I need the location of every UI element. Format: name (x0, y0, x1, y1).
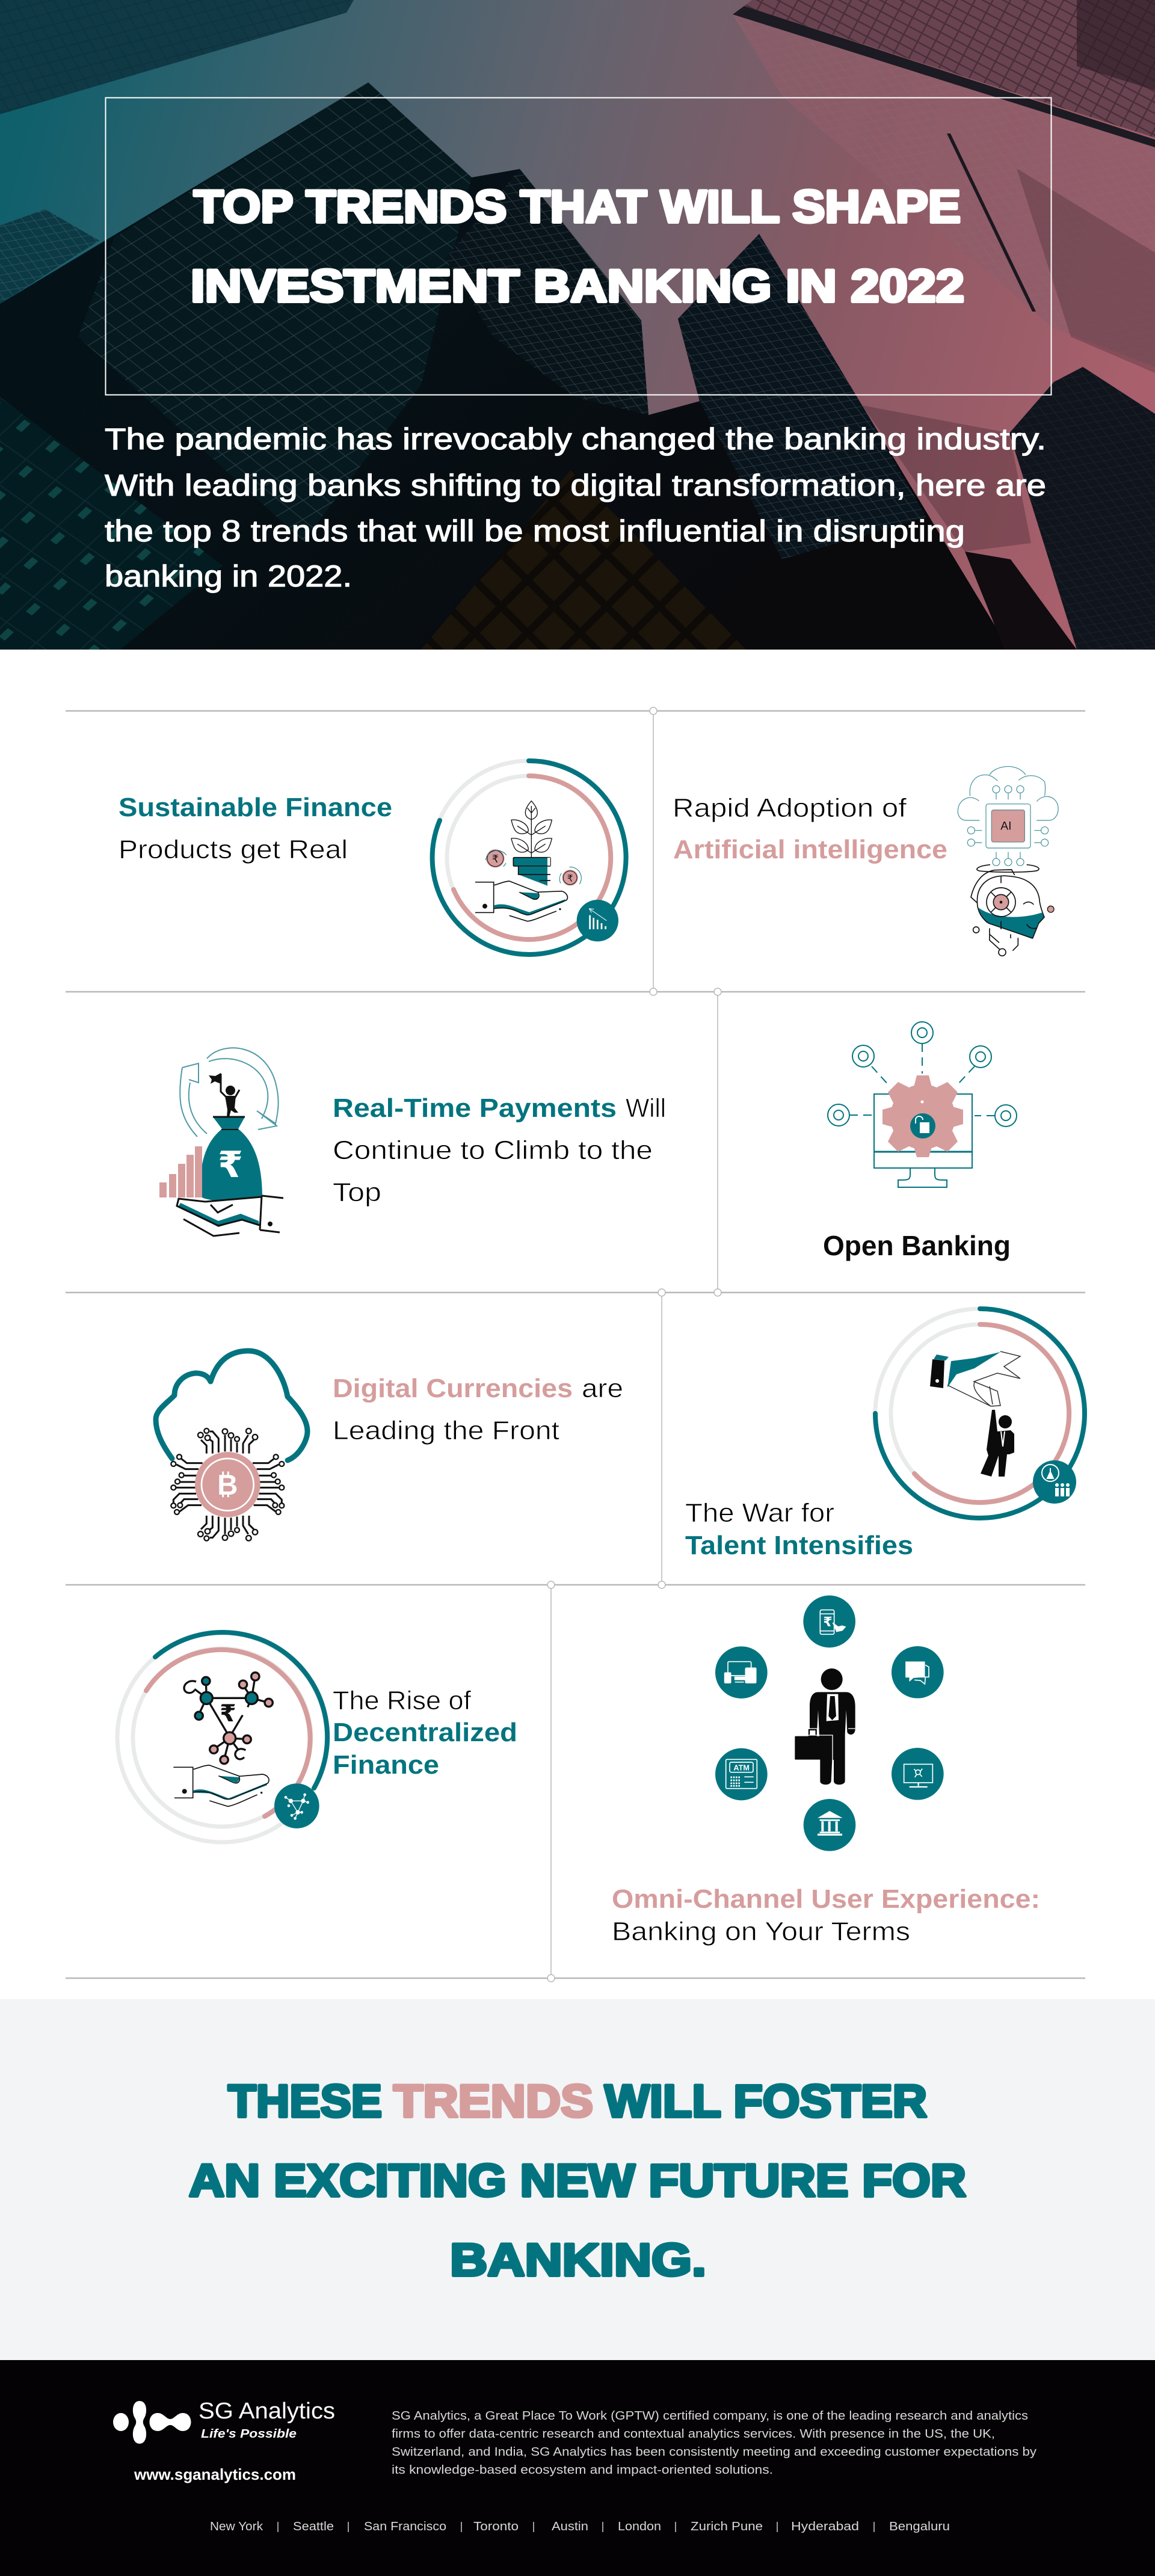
city list: Zurich Pune (691, 2520, 763, 2533)
heading: sustainable finance: Products get Real (119, 835, 348, 864)
panel: real-time payments (159, 1048, 666, 1236)
company description: its knowledge-based ecosystem and impact-oriented solutions. (392, 2464, 773, 2477)
icon: businessman with channel circles: ATM (733, 1763, 750, 1772)
conclusion band (0, 1999, 1155, 2360)
intro paragraph (105, 422, 1046, 593)
icon: businessman with channel circles: ₹ (823, 1615, 833, 1630)
icon: money bag on hand: ₹ (218, 1144, 243, 1186)
icon: network over hand with rings: ₹ (220, 1700, 236, 1727)
heading: omni-channel: Omni-Channel User Experience: (612, 1884, 1040, 1914)
footer (0, 2360, 1155, 2576)
intro paragraph: The pandemic has irrevocably changed the banking industry. (105, 422, 1046, 456)
city list: London (618, 2520, 661, 2533)
city list: Austin (552, 2520, 588, 2533)
heading: decentralized finance: Decentralized (333, 1718, 517, 1747)
conclusion text: THESE (228, 2076, 382, 2127)
title (191, 182, 964, 312)
heading: decentralized finance: Finance (333, 1750, 439, 1780)
icon: gear in monitor with satellites (828, 1022, 1017, 1187)
heading: real-time payments: Top (333, 1178, 381, 1207)
heading: artificial intelligence: Rapid Adoption of (673, 793, 907, 823)
intro paragraph: banking in 2022. (105, 559, 352, 593)
heading: sustainable finance: Sustainable Finance (119, 793, 392, 822)
brand name: Life's Possible (201, 2427, 297, 2441)
panel: decentralized finance (117, 1632, 517, 1842)
icon: cloud with bitcoin chip: B (217, 1469, 238, 1501)
heading: digital currencies: Digital Currencies (333, 1374, 573, 1403)
heading: real-time payments: Real-Time Payments (333, 1093, 617, 1123)
panel: sustainable finance (119, 761, 626, 954)
icon: plant in hand with rings: ₹ (492, 853, 499, 865)
title: INVESTMENT BANKING IN 2022 (191, 261, 964, 312)
city list: San Francisco (364, 2520, 446, 2533)
city list: New York (210, 2520, 263, 2533)
hero banner (0, 0, 1155, 650)
icon: plant in hand with rings (432, 761, 626, 954)
panel grid lines (66, 707, 1085, 1982)
company description (392, 2409, 1036, 2477)
heading: open banking: Open Banking (823, 1230, 1011, 1261)
heading: omni-channel (612, 1884, 1040, 1946)
city list: Hyderabad (791, 2520, 859, 2533)
heading: digital currencies: are (582, 1374, 623, 1403)
icon: money bag on hand (159, 1048, 283, 1236)
panel: war for talent (685, 1309, 1085, 1560)
brand name: www.sganalytics.com (134, 2465, 296, 2483)
brand name: SG Analytics (199, 2399, 335, 2424)
icon: hand and employee with rings (875, 1309, 1085, 1518)
conclusion text: AN EXCITING NEW FUTURE FOR (189, 2156, 966, 2206)
intro paragraph: With leading banks shifting to digital transformation, here are (105, 469, 1046, 502)
title box (106, 97, 1052, 395)
conclusion text: WILL FOSTER (605, 2076, 927, 2127)
conclusion text (189, 2076, 966, 2286)
company description: Switzerland, and India, SG Analytics has been consistently meeting and exceeding customer expectations by (392, 2445, 1036, 2459)
heading: sustainable finance (119, 793, 392, 864)
icon: businessman with channel circles (715, 1596, 944, 1851)
heading: artificial intelligence (673, 793, 947, 864)
icon: AI chip and robot head: AI (1000, 820, 1011, 832)
conclusion text: TRENDS (393, 2076, 593, 2127)
city list: Seattle (293, 2520, 334, 2533)
city list: Bengaluru (889, 2520, 950, 2533)
heading: war for talent (685, 1498, 913, 1560)
panel: omni-channel (612, 1596, 1040, 1946)
city list (210, 2520, 950, 2533)
company description: firms to offer data-centric research and contextual analytics services. With presence in the US, the UK, (392, 2427, 995, 2441)
heading: real-time payments: Will (626, 1093, 666, 1123)
title: TOP TRENDS THAT WILL SHAPE (194, 182, 961, 232)
heading: digital currencies (333, 1374, 623, 1445)
icon: plant in hand with rings: ₹ (567, 873, 573, 884)
heading: artificial intelligence: Artificial intelligence (673, 835, 947, 864)
intro paragraph: the top 8 trends that will be most influential in disrupting (105, 514, 965, 548)
heading: war for talent: The War for (685, 1498, 834, 1528)
panel: artificial intelligence (673, 766, 1058, 956)
heading: real-time payments: Continue to Climb to the (333, 1136, 653, 1165)
panel: open banking (823, 1022, 1017, 1261)
logo (113, 2401, 191, 2444)
panel: digital currencies (156, 1351, 623, 1541)
icon: AI chip and robot head (958, 766, 1058, 956)
heading: digital currencies: Leading the Front (333, 1416, 559, 1445)
icon: network over hand with rings (117, 1632, 327, 1842)
heading: decentralized finance (333, 1686, 517, 1780)
heading: decentralized finance: The Rise of (333, 1686, 472, 1715)
city list: Toronto (473, 2520, 519, 2533)
heading: omni-channel: Banking on Your Terms (612, 1917, 910, 1946)
heading: real-time payments (333, 1093, 666, 1207)
company description: SG Analytics, a Great Place To Work (GPTW) certified company, is one of the leading research and analytics (392, 2409, 1028, 2423)
conclusion text: BANKING. (450, 2235, 706, 2286)
heading: war for talent: Talent Intensifies (685, 1531, 913, 1560)
brand name (134, 2399, 335, 2483)
icon: cloud with bitcoin chip (156, 1351, 307, 1541)
